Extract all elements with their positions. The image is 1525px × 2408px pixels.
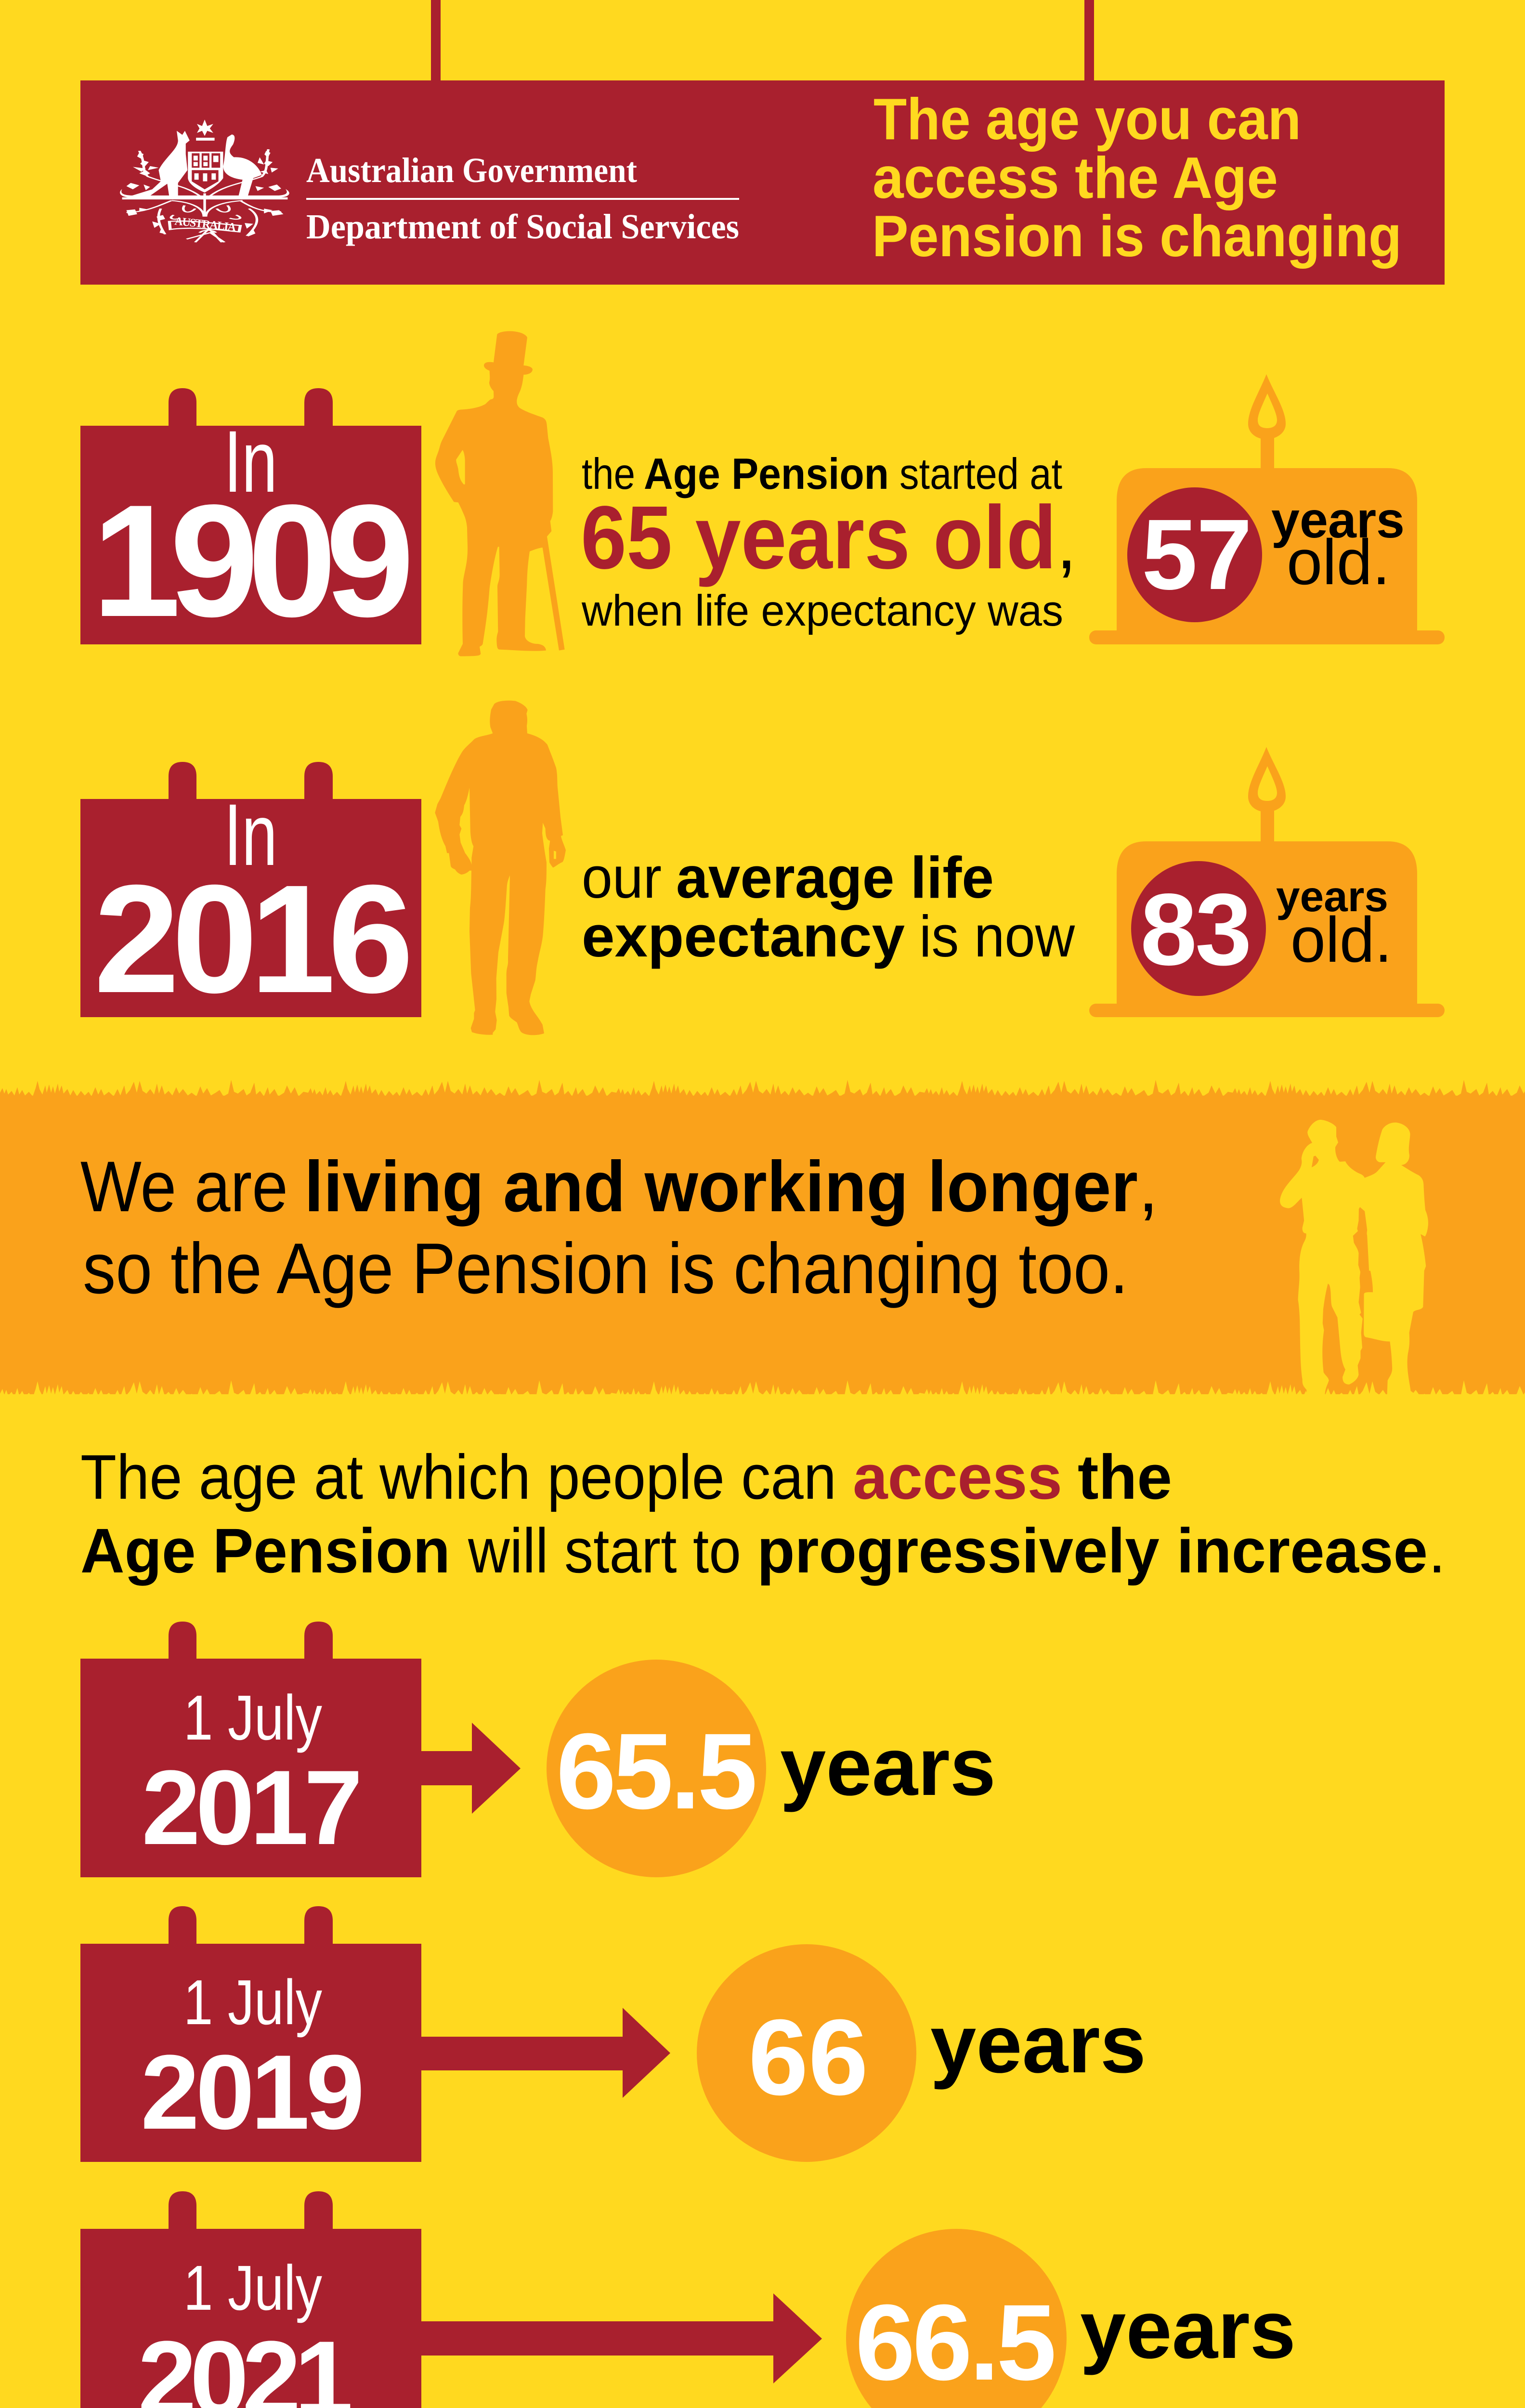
circle: 66.5 [846,2229,1067,2408]
text: our average life expectancy is now: expectancy [582,903,905,969]
icon: birthday cake 57 years old: 57 [1142,499,1251,611]
text: progressive increase statement: will start to [468,1515,741,1586]
text: progressive increase statement: Age Pension [80,1515,450,1586]
text: our average life expectancy is now [582,845,1075,969]
circle: 66 [697,1944,916,2162]
label: years: years [780,1721,996,1813]
icon: birthday cake 83 years old [1089,747,1445,1017]
icon: birthday cake 83 years old: years [1276,872,1388,920]
text: we are living and working longer: We are [80,1146,288,1227]
arrow [421,2293,822,2383]
label: years: years [930,1998,1146,2090]
icon: older couple silhouette [1280,1120,1428,1396]
text: the Age Pension started at 65 years old: 65 years old [581,488,1056,588]
text: our average life expectancy is now: average life [676,845,994,910]
title: Pension is changing [872,203,1402,269]
timeline row: 1 July 2021, 66.5 years [80,2191,1296,2408]
text: the Age Pension started at 65 years old: Age Pension [644,450,889,498]
icon: birthday cake 83 years old: old. [1290,904,1392,976]
calendar: 1 July 2019 [80,1906,421,2162]
text: we are living and working longer: living and working longer [304,1146,1138,1227]
text: the Age Pension started at 65 years old: , [1056,503,1077,584]
calendar: 1 July 2017: 1 July [183,1682,322,1753]
calendar: 1 July 2019: 1 July [183,1967,322,2038]
panel: header banner [80,0,1445,285]
calendar: In 1909: In [224,412,277,510]
text: progressive increase statement [80,1441,1446,1586]
arrow [421,1723,521,1814]
text: progressive increase statement: access [853,1441,1062,1512]
icon: birthday cake 57 years old: old. [1287,527,1390,598]
timeline row: 1 July 2017, 65.5 years [80,1622,996,1877]
circle: 65.5 [547,1660,766,1877]
icon: standing older man [435,701,566,1035]
text: the Age Pension started at 65 years old: when life expectancy was [581,587,1063,635]
text: our average life expectancy is now: is now [919,903,1075,969]
text: progressive increase statement: The age at which people can [80,1441,836,1512]
icon: birthday cake 57 years old: years [1271,492,1405,549]
icon: coat of arms [120,119,289,242]
text: the Age Pension started at 65 years old: started at [899,450,1062,498]
icon: birthday cake 57 years old [1089,374,1445,644]
text: our average life expectancy is now: our [582,845,662,910]
text: we are living and working longer: , [1138,1146,1158,1227]
calendar: In 2016: 2016 [94,852,410,1025]
calendar: 1 July 2017: 2017 [142,1748,358,1867]
circle: 66: 66 [748,1997,868,2118]
label: years: years [1080,2284,1296,2376]
arrow [421,2008,670,2098]
panel: living and working longer band [0,1080,1525,1400]
title [872,86,1402,269]
circle: 65.5: 65.5 [556,1711,755,1832]
text: progressive increase statement: . [1428,1515,1446,1586]
timeline row: 1 July 2019, 66 years [80,1906,1146,2162]
text: the Age Pension started at 65 years old: the [582,450,635,498]
logo text: Department of Social Services: Department of Social Services [306,207,739,246]
calendar: In 1909 [80,388,421,650]
text: we are living and working longer: so the Age Pension is changing too. [83,1228,1128,1309]
text: the Age Pension started at 65 years old [581,450,1077,635]
icon: man with top hat and cane [435,331,565,656]
calendar: 1 July 2021: 1 July [183,2252,322,2323]
text: progressive increase statement: the [1078,1441,1172,1512]
text: we are living and working longer [80,1146,1158,1309]
title: access the Age [873,145,1278,210]
icon: birthday cake 83 years old: 83 [1140,872,1250,986]
title: The age you can [873,86,1301,152]
circle: 66.5: 66.5 [855,2282,1054,2403]
calendar: In 1909: 1909 [92,471,410,650]
text: progressive increase statement: progressively increase [757,1515,1428,1586]
icon: coat of arms: AUSTRALIA [174,215,237,234]
calendar: In 2016: In [224,785,277,884]
calendar: 1 July 2019: 2019 [141,2033,361,2151]
calendar: 1 July 2017 [80,1622,421,1877]
calendar: 1 July 2021 [80,2191,421,2408]
logo text: Australian Government: Australian Government [306,151,637,190]
calendar: In 2016 [80,762,421,1025]
